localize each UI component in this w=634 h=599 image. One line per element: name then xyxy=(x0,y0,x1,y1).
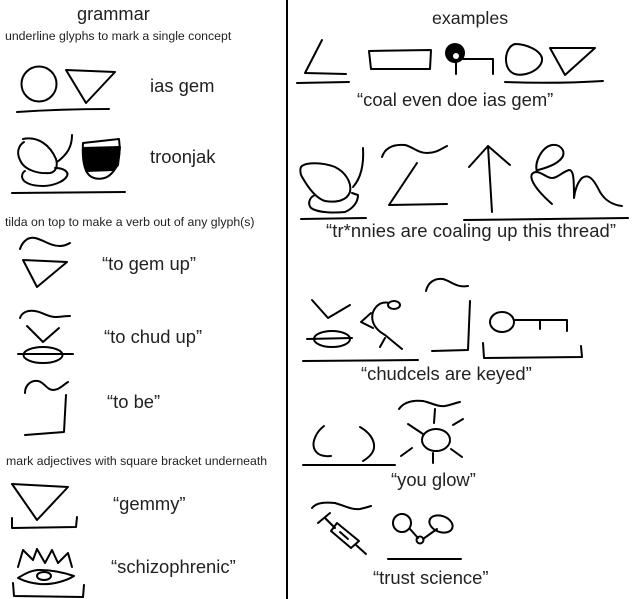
icon: ias gem glyphs xyxy=(17,66,115,112)
icon: chudcels are keyed glyphs xyxy=(303,279,582,361)
text: underline rule: underline glyphs to mark a single concept xyxy=(5,29,232,43)
icon: you glow glyphs xyxy=(303,401,463,465)
icon: gemmy glyph xyxy=(12,484,77,528)
text: coal even doe ias gem: “coal even doe ias gem” xyxy=(357,89,553,110)
icon: to be glyph xyxy=(25,381,68,435)
text: to chud up: “to chud up” xyxy=(104,326,202,347)
text: to gem up: “to gem up” xyxy=(102,253,196,274)
text: coaling up caption: “tr*nnies are coaling up this thread” xyxy=(326,220,616,241)
text: to be: “to be” xyxy=(107,391,160,412)
panel: grammar xyxy=(5,4,267,597)
heading: examples: examples xyxy=(432,8,508,28)
icon: coaling up thread glyphs xyxy=(300,145,628,220)
panel: examples xyxy=(297,8,628,588)
icon: trust science glyphs xyxy=(312,503,461,559)
text: adjective rule: mark adjectives with square bracket underneath xyxy=(6,454,267,468)
text: trust science: “trust science” xyxy=(373,567,488,588)
icon: to gem up glyph xyxy=(20,238,70,287)
heading: grammar: grammar xyxy=(77,4,150,24)
icon: schizophrenic glyph xyxy=(13,549,84,597)
text: gemmy: “gemmy” xyxy=(113,493,186,514)
icon: troonjak glyphs xyxy=(12,135,125,193)
icon: coal even doe ias gem glyphs xyxy=(297,40,603,83)
text: chudcels are keyed: “chudcels are keyed” xyxy=(361,363,532,384)
text: troonjak: troonjak xyxy=(150,146,216,167)
text: ias gem: ias gem xyxy=(150,75,214,96)
text: you glow: “you glow” xyxy=(391,469,476,490)
text: schizophrenic: “schizophrenic” xyxy=(111,556,236,577)
icon: to chud up glyph xyxy=(18,311,73,363)
text: tilda rule: tilda on top to make a verb out of any glyph(s) xyxy=(5,215,254,229)
